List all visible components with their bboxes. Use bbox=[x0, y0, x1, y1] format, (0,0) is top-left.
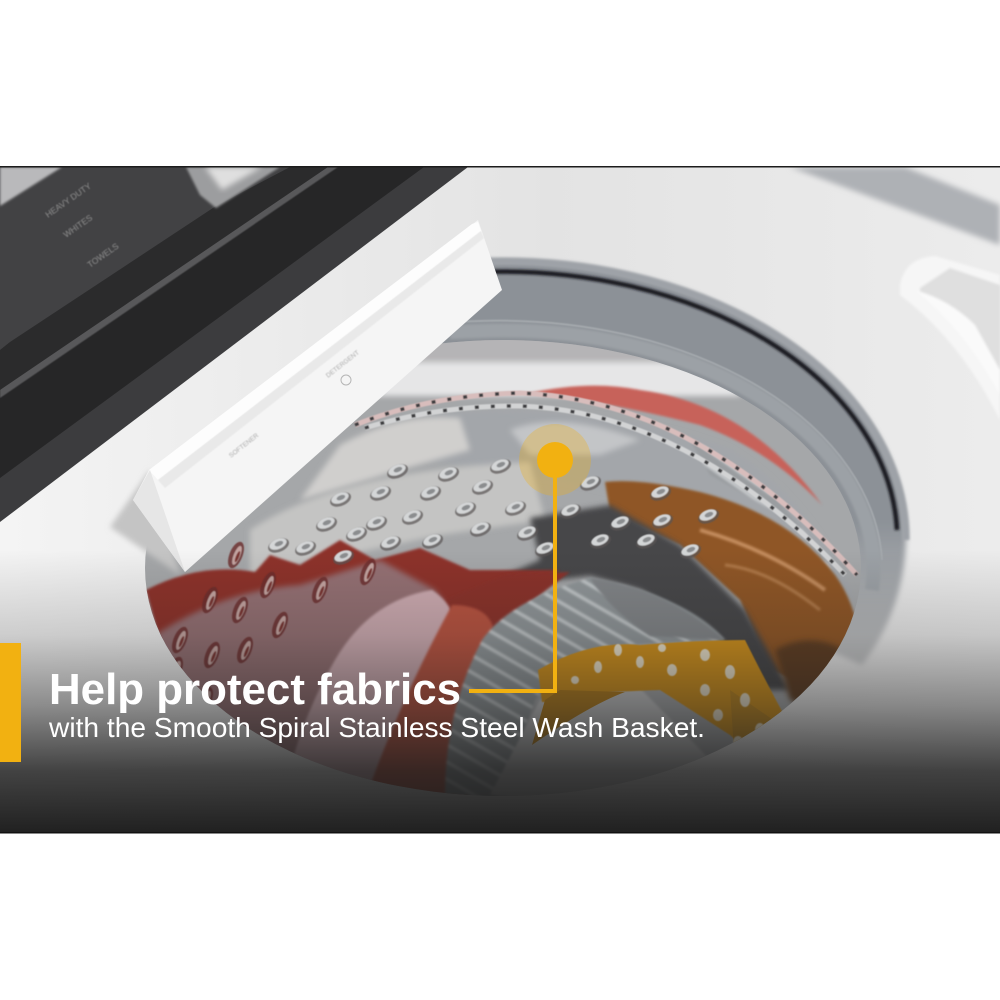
pink cloth bbox=[294, 588, 451, 764]
basket rim perforations bbox=[355, 393, 857, 575]
callout: yellow marker and leader line bbox=[469, 424, 591, 691]
mustard polka cloth bbox=[532, 639, 782, 745]
control console: TOWELS bbox=[85, 241, 121, 270]
heading: Help protect fabrics bbox=[49, 665, 461, 714]
yellow accent bar bbox=[0, 643, 21, 762]
gray reflections bbox=[430, 412, 855, 600]
knit white cloth bbox=[504, 691, 699, 774]
dark reflection bbox=[470, 505, 790, 690]
red reflection bbox=[146, 540, 560, 640]
red cloth bbox=[446, 571, 570, 628]
steel dimples bbox=[164, 456, 721, 715]
deck rear stripe bbox=[790, 167, 1000, 245]
upper rim bbox=[422, 340, 659, 363]
control console: WHITES bbox=[61, 212, 94, 240]
silver highlights bbox=[300, 417, 470, 500]
washer deck bbox=[0, 168, 1000, 742]
lid dispenser: DETERGENT bbox=[325, 349, 361, 380]
subheading: with the Smooth Spiral Stainless Steel Wash Basket. bbox=[48, 712, 705, 743]
photo panel: washer top view bbox=[0, 167, 1000, 833]
coral cloth bbox=[365, 605, 495, 800]
dispenser labels: SOFTENER bbox=[228, 432, 260, 460]
bottom dark gradient bbox=[0, 550, 1000, 833]
gray gasket crescent bbox=[400, 261, 906, 665]
striped gray cloth bbox=[445, 578, 725, 800]
console labels: HEAVY DUTY bbox=[43, 181, 93, 220]
lid dispenser bbox=[110, 220, 502, 575]
control console bbox=[0, 167, 468, 522]
brown reflection bbox=[604, 479, 854, 684]
basket base steel bbox=[145, 392, 860, 756]
deck handle bbox=[900, 256, 1000, 420]
wash basket bbox=[140, 335, 870, 810]
mauve reflection bbox=[159, 559, 445, 753]
coral reflection bbox=[530, 386, 822, 505]
panel border lines bbox=[0, 166, 1000, 168]
brown lower ripple bbox=[774, 638, 840, 704]
